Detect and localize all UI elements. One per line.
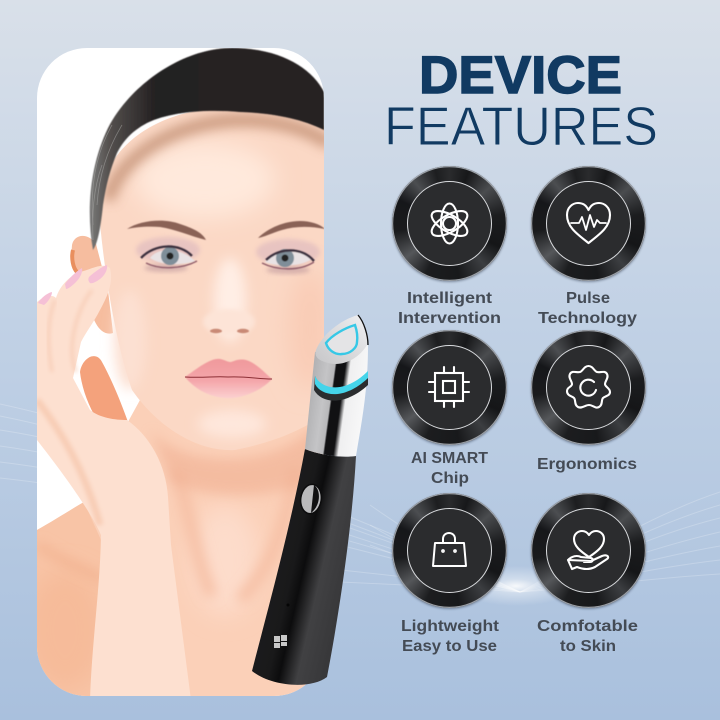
feature: Pulse Technology icon bbox=[531, 166, 646, 281]
feature labels: Ergonomics bbox=[537, 456, 637, 473]
feature labels: Comfotable bbox=[537, 618, 638, 635]
hand bbox=[37, 265, 191, 700]
feature: Ergonomics icon bbox=[531, 330, 646, 445]
feature labels: Intervention bbox=[398, 310, 501, 327]
feature labels: Pulse bbox=[566, 290, 610, 307]
panel: model portrait photo bbox=[37, 48, 324, 696]
feature labels: Technology bbox=[538, 310, 637, 327]
feature labels: AI SMART bbox=[411, 450, 488, 467]
eyes bbox=[136, 237, 320, 274]
glowing ring bbox=[314, 371, 368, 401]
lips bbox=[185, 359, 272, 398]
nose bbox=[203, 309, 255, 335]
feature: Lightweight Easy to Use icon bbox=[392, 493, 507, 608]
handle bbox=[252, 449, 356, 685]
feature labels: Intelligent bbox=[407, 290, 493, 307]
eyebrows bbox=[127, 221, 325, 240]
feature: Intelligent Intervention icon bbox=[392, 166, 507, 281]
face bbox=[98, 108, 340, 450]
hair bbox=[90, 48, 330, 250]
feature labels: Lightweight bbox=[401, 618, 500, 635]
title: FEATURES bbox=[384, 95, 658, 157]
feature: AI SMART Chip icon bbox=[392, 330, 507, 445]
feature labels: Chip bbox=[431, 470, 469, 487]
feature labels: Easy to Use bbox=[402, 638, 497, 655]
feature: Comfortable to Skin icon bbox=[531, 493, 646, 608]
title: DEVICE bbox=[419, 46, 622, 105]
head top with light bbox=[315, 315, 368, 364]
shoulder and chest skin bbox=[25, 400, 330, 700]
ear bbox=[72, 236, 113, 334]
feature labels: to Skin bbox=[560, 638, 616, 655]
silver neck bbox=[305, 345, 368, 457]
